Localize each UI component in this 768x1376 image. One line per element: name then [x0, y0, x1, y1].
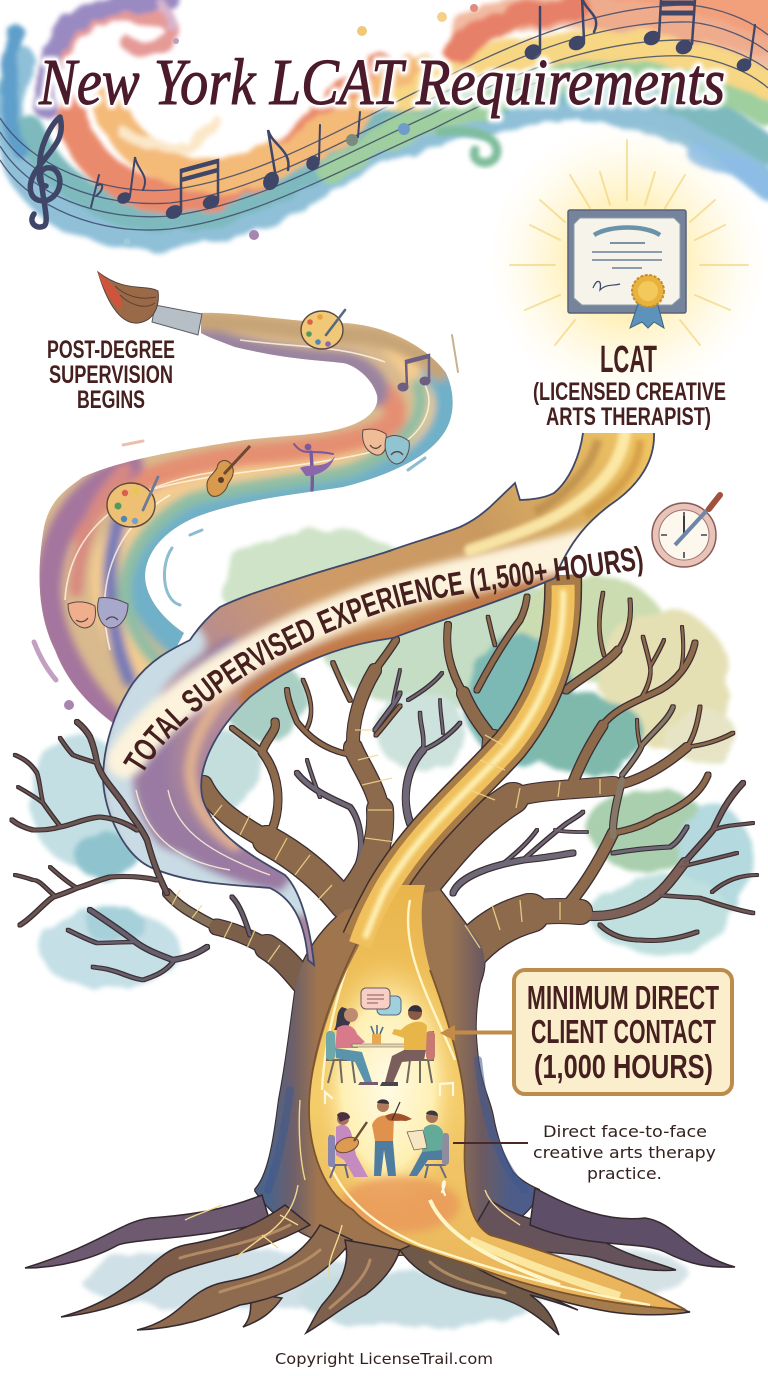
music notes [91, 0, 755, 221]
speech bubbles [361, 988, 401, 1015]
trunk body [255, 890, 539, 1255]
band outline [103, 433, 654, 965]
big right branch R1 [420, 627, 733, 890]
right-up branch [566, 593, 630, 690]
chairs [327, 1031, 433, 1083]
glowing gold core of trunk [309, 585, 686, 1310]
white music notes in trunk [325, 1083, 453, 1195]
stream gold overlay [360, 585, 563, 945]
branches [167, 593, 757, 992]
golden band: total supervised experience [90, 420, 670, 980]
reader with sheet music [407, 1110, 443, 1176]
man therapist [380, 1005, 427, 1086]
ground wash under roots [80, 1250, 690, 1328]
description text: creative arts therapy [533, 1143, 716, 1162]
header rainbow wave [0, 0, 768, 246]
certificate frame [568, 210, 686, 313]
label: post-degree supervision begins [47, 336, 175, 414]
tree trunk and branches [167, 593, 757, 1255]
core contents [312, 900, 650, 1305]
icon: clock with paintbrush [652, 495, 720, 567]
tree roots [25, 1060, 735, 1335]
certificate paper [574, 218, 680, 305]
icon: palette left [107, 477, 158, 527]
icon: guitar [207, 446, 250, 496]
certificate lines [592, 228, 662, 290]
purple paint dot [64, 700, 74, 710]
description text: practice. [587, 1164, 662, 1183]
callout: minimum direct client contact: (1,000 HOURS) [534, 1048, 713, 1085]
icon: treble clef [30, 117, 61, 227]
band colors [104, 433, 654, 963]
paint dots [124, 4, 722, 246]
icon: ballerina [294, 444, 335, 490]
label: post-degree supervision begins: POST-DEGREE [47, 336, 175, 364]
copyright: Copyright LicenseTrail.com [275, 1350, 493, 1368]
icon: LCAT certificate with glow [487, 122, 767, 402]
branch left of stream [447, 597, 527, 810]
leader line [453, 1142, 528, 1144]
swoosh marks [34, 335, 458, 680]
label: LCAT: ARTS THERAPIST) [546, 403, 711, 431]
icon: palette top [301, 310, 345, 349]
ferrule [152, 305, 202, 335]
green curl [440, 131, 497, 163]
cup with pencils [371, 1025, 383, 1044]
guitarist [333, 1112, 368, 1177]
yellow segment marks on branches [172, 730, 600, 962]
icon: paintbrush [98, 272, 202, 335]
label: LCAT: LCAT [600, 339, 657, 381]
big right branch R2 [465, 775, 757, 955]
people: client talk scene [326, 988, 435, 1086]
icon: theater masks lower [68, 597, 128, 628]
branch B1 base [167, 893, 312, 992]
highlights [65, 340, 429, 650]
ribbon colors [40, 312, 453, 723]
glow [487, 122, 767, 402]
branch B3 [287, 640, 400, 895]
people: music therapy scene [328, 1099, 449, 1178]
trunk segment marks [185, 1100, 520, 1280]
band label: TOTAL SUPERVISED EXPERIENCE (1,500+ HOURS) [122, 546, 643, 770]
label: post-degree supervision begins: SUPERVISION [49, 361, 173, 389]
brush bristles [98, 272, 158, 323]
root shapes [25, 1188, 735, 1335]
chairs [330, 1135, 447, 1178]
gold shape [309, 885, 686, 1310]
stream highlight [365, 590, 563, 938]
gold stream branch [360, 575, 563, 940]
slate background twigs [297, 670, 687, 893]
lower-left branch tips [12, 722, 250, 980]
woman client [334, 1007, 378, 1085]
root highlights [180, 1225, 505, 1308]
icon: theater masks [363, 429, 409, 464]
rays [510, 140, 748, 345]
icon: beamed music note [398, 355, 430, 391]
ribbon band: creative arts path [30, 300, 460, 740]
table [352, 1044, 407, 1047]
violinist [372, 1099, 412, 1176]
ribbon seal [630, 275, 664, 328]
brush tip [98, 272, 121, 310]
label: LCAT [533, 339, 726, 431]
foliage [30, 530, 750, 990]
trunk blue shade lines [268, 1060, 525, 1190]
core edge lines [309, 925, 686, 1310]
branch B2 [203, 722, 345, 905]
description text: Direct face-to-face [543, 1122, 707, 1141]
callout arrow [440, 1025, 514, 1041]
description text [533, 1122, 716, 1183]
label: post-degree supervision begins: BEGINS [77, 386, 145, 414]
callout: minimum direct client contact [514, 970, 732, 1094]
watercolor wave [8, 0, 768, 235]
staff lines [0, 5, 768, 230]
